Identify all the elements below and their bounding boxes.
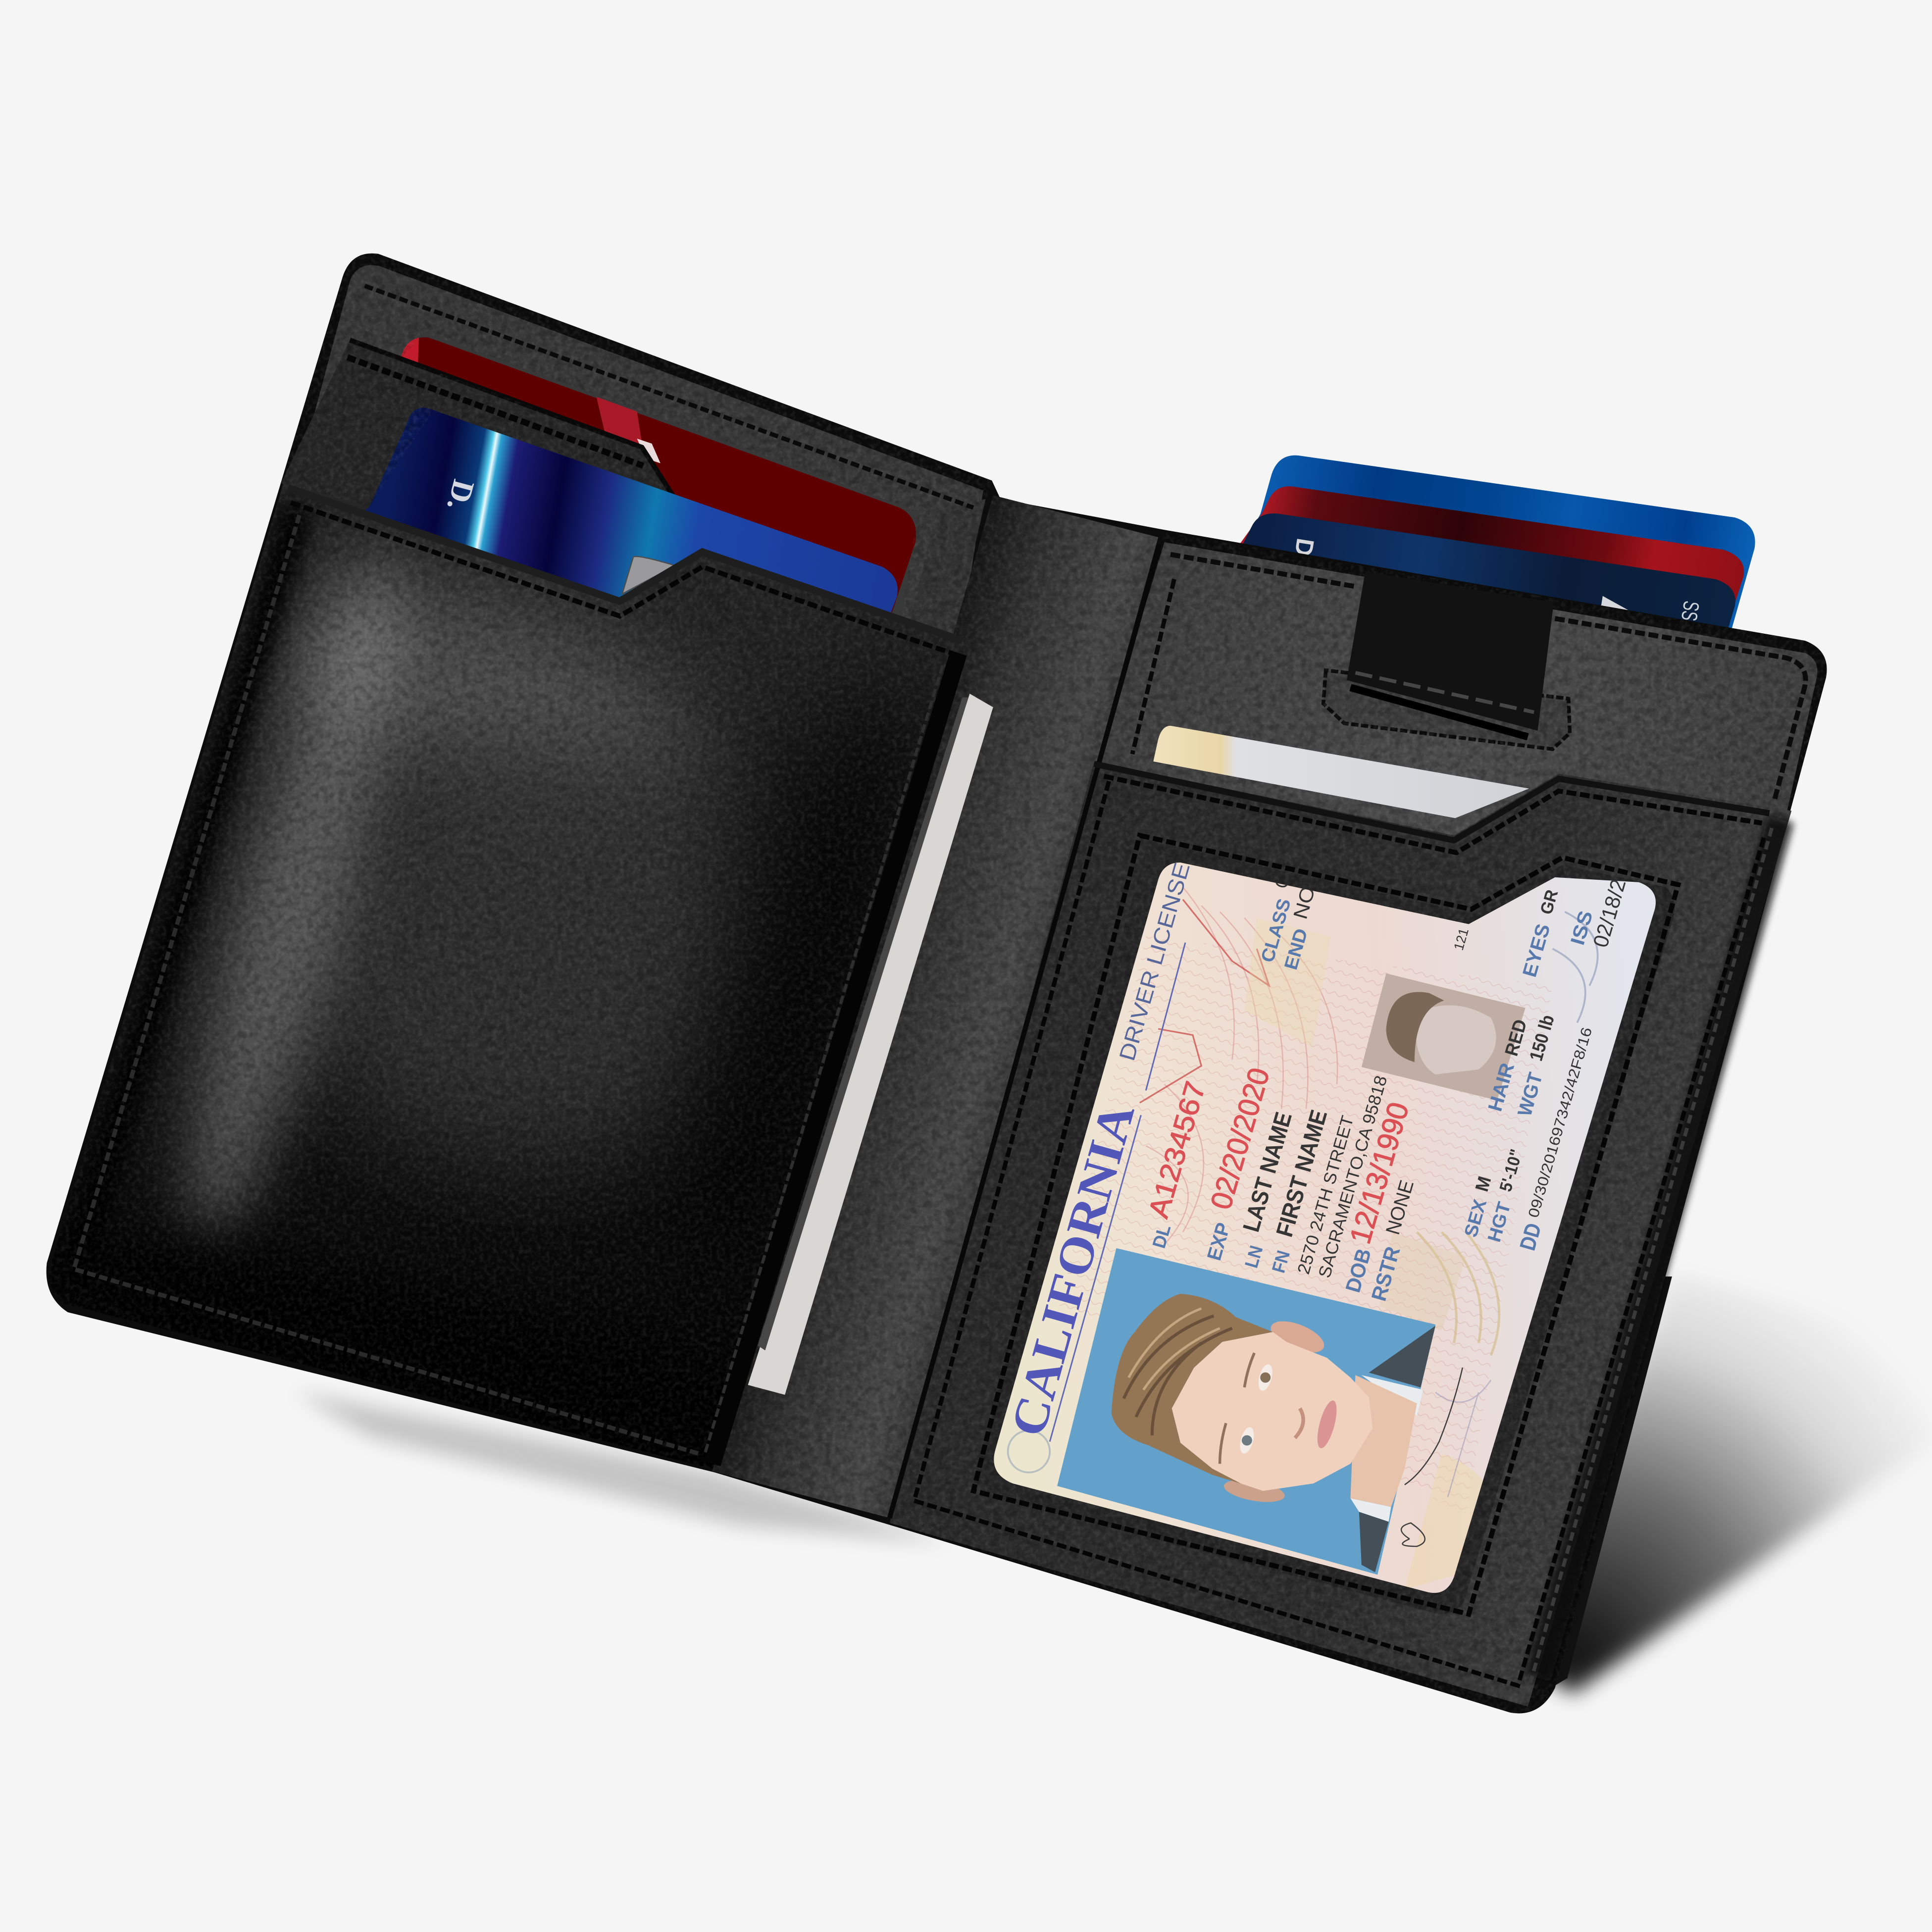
license fields: C: [1270, 873, 1294, 891]
navy card: [1232, 513, 1735, 664]
card monogram: D.: [440, 476, 480, 514]
license fields: DD: [1515, 1220, 1546, 1253]
photo: [1057, 1248, 1435, 1575]
license fields: 2570 24TH STREET: [1294, 1114, 1358, 1276]
panel: left front pocket: [33, 483, 969, 1538]
hair: [1112, 1294, 1273, 1483]
panel: left middle pocket: [281, 340, 675, 524]
protruding cards behind right panel: [1240, 456, 1755, 628]
neck: [1350, 1375, 1417, 1507]
license fields: SACRAMENTO,CA 95818: [1315, 1073, 1391, 1280]
license fields: LAST NAME: [1238, 1109, 1297, 1235]
license fields: NO: [1289, 884, 1320, 921]
license fields: SEX: [1460, 1197, 1490, 1239]
panel: right lower window frame: [890, 762, 1791, 1707]
navy card: D: [1289, 536, 1320, 559]
white card in spine slot: [748, 694, 993, 1395]
navy card: A: [1576, 591, 1677, 664]
license fields: DL: [1148, 1222, 1174, 1251]
license fields: HGT: [1483, 1199, 1515, 1244]
california title: CALIFORNIA: [1000, 1097, 1145, 1442]
license window glare: [994, 863, 1656, 1593]
face: [1172, 1332, 1373, 1491]
wallet product illustration: [47, 254, 1914, 1713]
red card: [401, 337, 916, 612]
license fields: HAIR: [1484, 1061, 1519, 1114]
license fields: 121: [1451, 926, 1472, 952]
title rule: [1050, 943, 1185, 1442]
back layer edge: [1555, 1276, 1672, 1685]
license fields: RED: [1501, 1017, 1531, 1058]
blue card: [357, 407, 898, 616]
red card: [1232, 486, 1744, 604]
panel: central spine: [712, 495, 1158, 1518]
panel: right upper interior: [1097, 542, 1817, 840]
navy card: SS: [1677, 599, 1704, 622]
slot surround: [1323, 670, 1570, 749]
cast shadow: [296, 1274, 1932, 1694]
license heading: DRIVER LICENSE: [1115, 860, 1195, 1064]
ears: [1267, 1315, 1328, 1359]
license fields: 150 lb: [1525, 1013, 1558, 1063]
license fields: FN: [1268, 1248, 1294, 1275]
license fields: 02/18/20: [1589, 865, 1633, 950]
license fields: 12/13/1990: [1343, 1099, 1415, 1247]
license fields: 09/30/201697342/42F8/16: [1525, 1025, 1595, 1220]
collar: [1362, 1375, 1423, 1416]
license fields: ISS: [1567, 909, 1597, 948]
panel: left upper back: [296, 265, 986, 647]
ghost portrait: [1362, 973, 1525, 1100]
signature: [1401, 1368, 1463, 1546]
license fields: EXP: [1203, 1220, 1235, 1263]
pull tab: [1347, 572, 1554, 737]
license fields: CLASS: [1257, 896, 1295, 965]
license fields: FIRST NAME: [1271, 1107, 1332, 1240]
license fields: NONE: [1382, 1178, 1418, 1237]
leather grain overlay: [37, 247, 1836, 1725]
seams and stitching: [74, 286, 1806, 1685]
license fields: GR: [1536, 888, 1562, 916]
license fields: RSTR: [1367, 1244, 1405, 1304]
license guilloche pattern: [1008, 887, 1598, 1589]
facial features: [1220, 1353, 1254, 1464]
license fields: LN: [1241, 1243, 1267, 1270]
license fields: 5'-10": [1496, 1147, 1526, 1194]
license fields: EYES: [1519, 921, 1555, 979]
card chip: [622, 557, 675, 594]
partially visible licence in upper slot: [1153, 726, 1529, 818]
license fields: A1234567: [1143, 1078, 1212, 1221]
license fields: WGT: [1514, 1070, 1547, 1119]
license fields: M: [1471, 1174, 1495, 1194]
suit: [1369, 1326, 1435, 1387]
driver license in window: [973, 850, 1676, 1614]
leather highlights: [33, 505, 969, 1538]
license fields: END: [1280, 926, 1312, 972]
license fields: DOB: [1341, 1246, 1375, 1295]
blue card: [1232, 456, 1755, 631]
license fields: [1143, 865, 1633, 1304]
wallet body: [47, 254, 1827, 1713]
license fields: 02/20/2020: [1204, 1064, 1276, 1213]
